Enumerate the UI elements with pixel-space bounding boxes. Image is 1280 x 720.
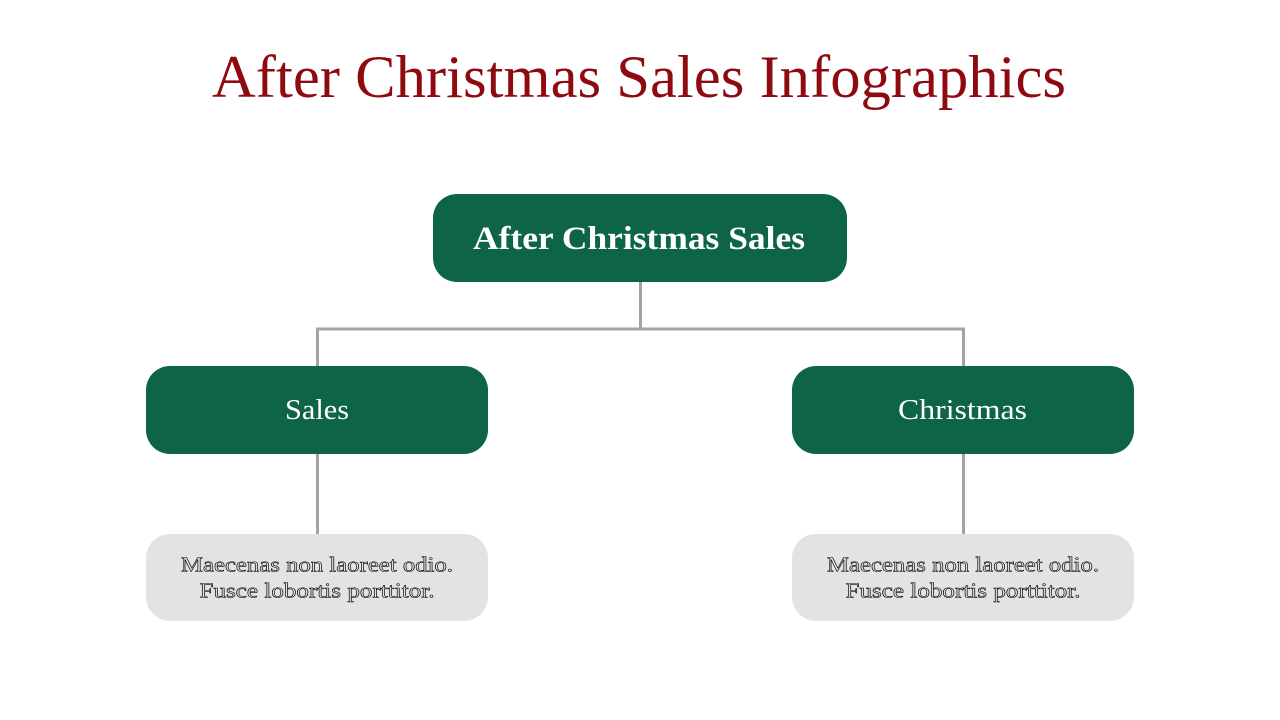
box: Christmas (792, 366, 1134, 454)
box: Christmas: Christmas (898, 395, 1027, 426)
text box: Sales detail: Fusce lobortis porttitor. (200, 578, 434, 602)
box: Sales: Sales (285, 395, 349, 426)
text box: Christmas detail: Fusce lobortis porttitor. (846, 578, 1080, 602)
title: After Christmas Sales Infographics (212, 44, 1066, 110)
root box: After Christmas Sales: After Christmas Sales (473, 221, 805, 257)
text box: Christmas detail: Maecenas non laoreet odio. (827, 552, 1099, 576)
connector lines (318, 282, 964, 534)
root box: After Christmas Sales (433, 194, 847, 282)
text box: Christmas detail (792, 534, 1134, 621)
text box: Sales detail: Maecenas non laoreet odio. (181, 552, 453, 576)
text box: Sales detail (146, 534, 488, 621)
box: Sales (146, 366, 488, 454)
